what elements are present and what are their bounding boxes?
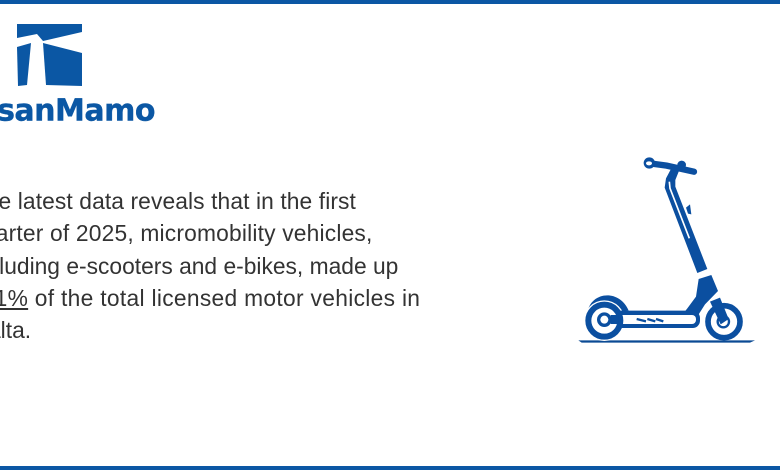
top border bbox=[0, 0, 780, 4]
handlebar bbox=[650, 163, 694, 172]
brake lever bbox=[686, 204, 691, 214]
icon: electric scooter bbox=[578, 157, 755, 343]
text block: micromobility statistic bbox=[0, 188, 420, 343]
deck bbox=[603, 311, 700, 328]
rear wheel bbox=[588, 305, 620, 337]
icon: lighthouse bbox=[17, 24, 82, 86]
fork bbox=[710, 298, 729, 324]
ground shadow bbox=[578, 340, 755, 343]
neck bbox=[683, 275, 718, 314]
stem bbox=[665, 168, 707, 273]
rear fender bbox=[587, 295, 629, 313]
logo bbox=[0, 24, 155, 128]
deck grip marks bbox=[637, 319, 663, 321]
front wheel bbox=[708, 306, 740, 338]
bottom border bbox=[0, 466, 780, 470]
